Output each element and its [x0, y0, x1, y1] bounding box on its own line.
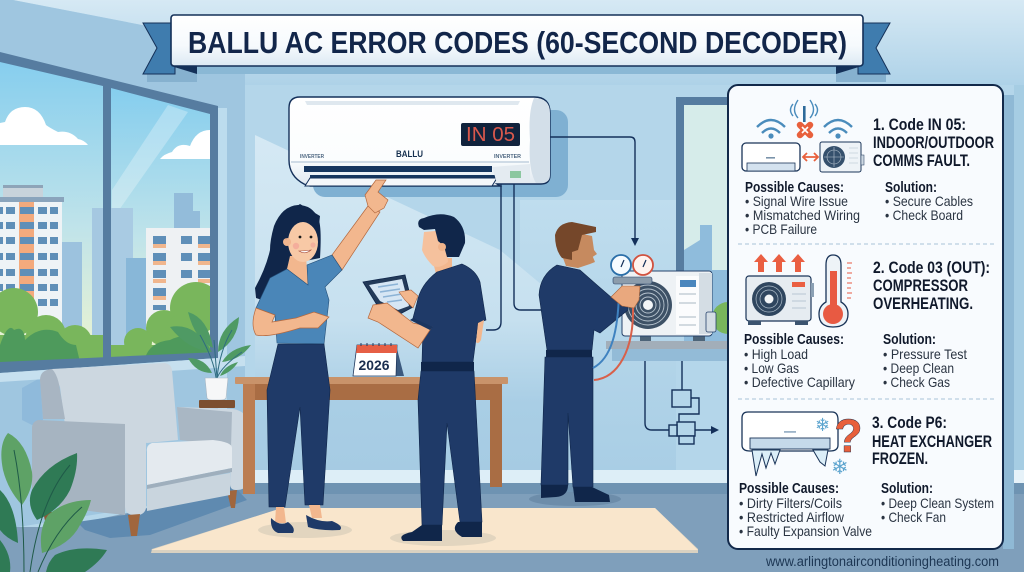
solution list: Solution: — [881, 481, 933, 497]
possible causes list: • PCB Failure — [745, 221, 817, 237]
heading: 1. Code IN 05: — [873, 115, 966, 134]
wall air conditioner indoor unit: INVERTER — [494, 154, 521, 160]
solution list: • Deep Clean System — [881, 495, 994, 511]
panel shadow — [1003, 85, 1024, 549]
person: technician at outdoor unit — [529, 222, 653, 506]
title banner — [143, 15, 890, 82]
possible causes list: Possible Causes: — [745, 180, 844, 196]
icon: frozen heat exchanger — [742, 409, 863, 479]
heading — [873, 115, 994, 170]
solution list: • Check Gas — [883, 374, 950, 390]
possible causes list: • Faulty Expansion Valve — [739, 523, 872, 539]
left window with city view — [0, 52, 245, 382]
possible causes list: Possible Causes: — [739, 481, 839, 497]
wall air conditioner indoor unit: INVERTER — [300, 154, 324, 160]
section 1: code IN 05 — [742, 100, 994, 237]
title text: BALLU AC ERROR CODES (60-SECOND DECODER) — [188, 25, 847, 60]
heading: OVERHEATING. — [873, 294, 973, 313]
possible causes list: • Signal Wire Issue — [745, 193, 848, 209]
heading — [873, 258, 990, 313]
refrigerant and signal lines — [486, 137, 712, 444]
solution list — [885, 180, 973, 223]
solution list: • Pressure Test — [883, 346, 967, 362]
brand label: BALLU — [396, 149, 423, 160]
heading: FROZEN. — [872, 449, 928, 468]
solution list: Solution: — [883, 332, 936, 348]
icon: comms fault — [742, 100, 864, 172]
possible causes list: Possible Causes: — [744, 332, 844, 348]
tablet — [363, 275, 413, 315]
icon: question mark: ? — [834, 409, 863, 462]
person: woman pointing at unit — [253, 180, 388, 538]
fan — [624, 281, 672, 329]
calendar 2026 — [353, 343, 404, 376]
icon: frozen heat exchanger: ❄ — [815, 415, 830, 435]
panel: error codes — [728, 85, 1003, 549]
solution list — [883, 332, 967, 390]
person: technician with tablet — [363, 214, 496, 546]
table plant — [170, 312, 251, 408]
possible causes list — [739, 481, 872, 539]
calendar 2026: 2026 — [358, 358, 390, 373]
error display: IN 05 — [466, 124, 515, 146]
possible causes list: • Mismatched Wiring — [745, 207, 860, 223]
foreground plant — [0, 433, 107, 572]
flow arrows — [631, 238, 719, 434]
heading: COMPRESSOR — [873, 276, 968, 295]
possible causes list: • Low Gas — [744, 360, 799, 376]
possible causes list: • Dirty Filters/Coils — [739, 495, 842, 511]
solution list: • Check Board — [885, 207, 963, 223]
icon: overheating compressor — [746, 254, 852, 327]
icon: frozen heat exchanger: ❄ — [831, 456, 849, 479]
section 2: code 03 — [744, 254, 990, 390]
possible causes list: • Restricted Airflow — [739, 509, 845, 525]
solution list — [881, 481, 994, 525]
possible causes list: • High Load — [744, 346, 808, 362]
possible causes list: • Defective Capillary — [744, 374, 855, 390]
website url: www.arlingtonairconditioningheating.com — [765, 554, 999, 569]
manifold gauges — [611, 255, 653, 284]
outdoor unit with shelf — [606, 271, 727, 361]
sofa — [32, 363, 247, 536]
heading: 3. Code P6: — [872, 413, 947, 432]
wall air conditioner indoor unit — [289, 97, 568, 197]
solution list: • Secure Cables — [885, 193, 973, 209]
solution list: • Deep Clean — [883, 360, 954, 376]
floor rug — [151, 508, 698, 553]
section 3: code P6 — [739, 409, 994, 539]
heading — [872, 413, 992, 468]
solution list: • Check Fan — [881, 509, 946, 525]
table — [235, 377, 508, 494]
heading: 2. Code 03 (OUT): — [873, 258, 990, 277]
possible causes list — [744, 332, 855, 390]
window frame — [0, 52, 218, 373]
refrigerant hoses — [593, 293, 633, 380]
heading: COMMS FAULT. — [873, 151, 970, 170]
right window behind panel — [676, 97, 727, 341]
possible causes list — [745, 180, 860, 237]
solution list: Solution: — [885, 180, 937, 196]
